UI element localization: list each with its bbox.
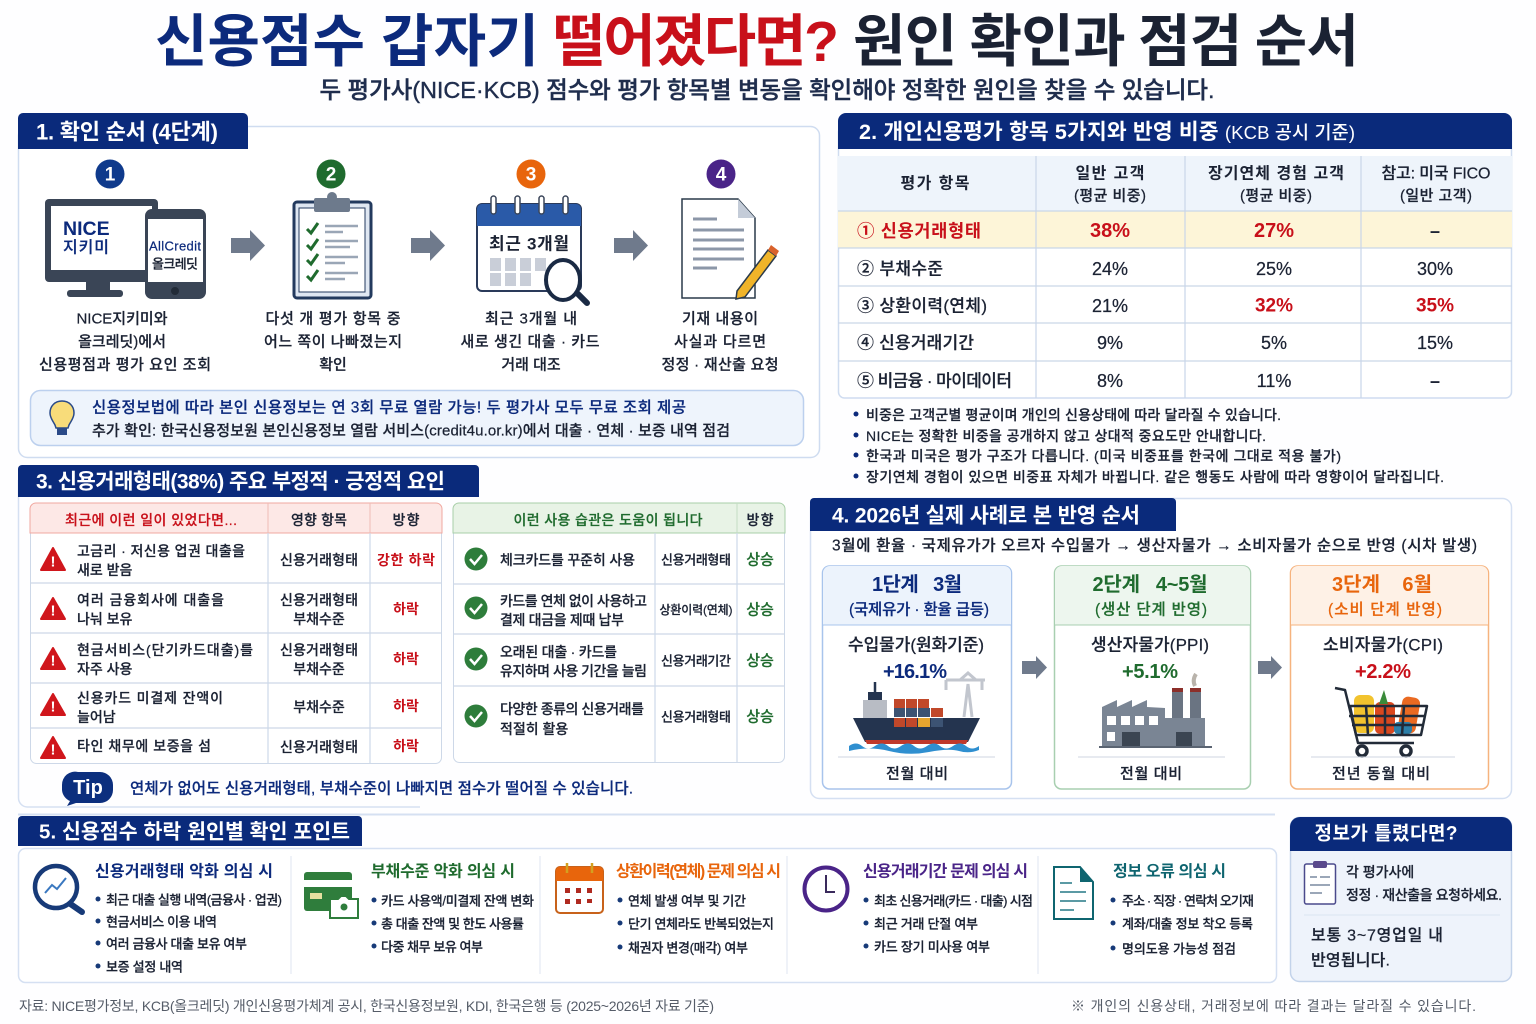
row 5: ! bbox=[50, 742, 56, 758]
table header: 방향 bbox=[746, 512, 774, 528]
step 3 text bbox=[460, 310, 600, 374]
card: 1단계: +16.1% bbox=[883, 661, 947, 683]
column: 정보 오류: 주소 · 직장 · 연락처 오기재 bbox=[1122, 894, 1254, 908]
title: 떨어졌다면? bbox=[553, 10, 839, 74]
callout: free report: 신용정보법에 따라 본인 신용정보는 연 3회 무료 열람 가능! 두 평가사 모두 무료 조회 제공 bbox=[92, 398, 686, 416]
row 2: ② 부채수준 bbox=[857, 260, 943, 278]
panel: 3. 신용거래형태 요인 bbox=[18, 465, 785, 807]
tip: Tip bbox=[73, 777, 103, 799]
heading: 정보가 틀렸다면 bbox=[1290, 817, 1512, 851]
row 1: 상승 bbox=[746, 552, 774, 568]
icon: monitor and phone: 올크레딧 bbox=[152, 256, 198, 272]
icon: light bulb bbox=[50, 401, 74, 435]
row 3: 상승 bbox=[746, 652, 774, 670]
card: 1단계: 수입물가(원화기준) bbox=[848, 636, 984, 654]
column: 정보 오류 bbox=[1054, 862, 1254, 956]
title: 신용점수 bbox=[155, 10, 365, 74]
notes under table: 한국과 미국은 평가 구조가 다릅니다. (미국 비중표를 한국에 그대로 적용 불가) bbox=[866, 448, 1341, 464]
row 4: 신용거래형태 bbox=[661, 710, 731, 724]
row 5: – bbox=[1430, 371, 1440, 391]
heading: 확인 순서: 1. 확인 순서 (4단계) bbox=[36, 120, 218, 144]
step 2 text: 어느 쪽이 나빠졌는지 bbox=[264, 334, 402, 350]
panel: 정보가 틀렸다면: 각 평가사에 bbox=[1346, 864, 1414, 880]
step 2 number bbox=[316, 160, 346, 188]
icon: credit card bbox=[304, 872, 358, 918]
icon: container ship bbox=[849, 673, 985, 754]
icon: clock bbox=[804, 868, 848, 910]
row 3: 부채수준 bbox=[293, 661, 345, 677]
tip bbox=[62, 772, 633, 806]
arrow bbox=[411, 230, 445, 261]
icon: calendar with magnifier: 최근 3개월 bbox=[489, 234, 569, 254]
row 4 bbox=[41, 690, 419, 725]
row 2: 결제 대금을 제때 납부 bbox=[500, 612, 624, 628]
column: 상환이력: 채권자 변경(매각) 여부 bbox=[628, 940, 748, 956]
footer: source: 자료: NICE평가정보, KCB(올크레딧) 개인신용평가체계 공시, 한국신용정보원, KDI, 한국은행 등 (2025~2026년 자료 기준) bbox=[19, 998, 714, 1014]
row 5: 하락 bbox=[393, 738, 419, 754]
step 4 number: 4 bbox=[716, 164, 727, 186]
card: 1단계: 1단계 3월 bbox=[872, 573, 962, 596]
icon: monitor and phone: NICE bbox=[63, 218, 110, 240]
card: 2단계: 2단계 4~5월 bbox=[1092, 573, 1208, 596]
table header: 일반 고객 bbox=[1076, 164, 1144, 182]
row 2: ! bbox=[50, 602, 56, 620]
row 4: 상승 bbox=[746, 708, 774, 726]
row 3: 35% bbox=[1416, 296, 1454, 316]
row 4: 부채수준 bbox=[293, 699, 345, 715]
table: negative factors bbox=[30, 503, 442, 764]
column: 신용거래기간: 신용거래기간 문제 의심 시 bbox=[863, 862, 1028, 880]
heading: 사례: 4. 2026년 실제 사례로 본 반영 순서 bbox=[832, 504, 1140, 528]
card: 1단계 bbox=[822, 566, 1012, 789]
row 2: 25% bbox=[1256, 259, 1292, 279]
step 3 text: 최근 3개월 내 bbox=[485, 310, 577, 328]
column: 상환이력 bbox=[556, 862, 781, 956]
title: 갑자기 bbox=[381, 10, 539, 74]
card: 3단계: 전년 동월 대비 bbox=[1332, 766, 1430, 782]
panel: 5. 확인 포인트 bbox=[18, 814, 1276, 982]
card: 2단계: 전월 대비 bbox=[1120, 766, 1182, 782]
table: positive factors bbox=[453, 503, 785, 762]
heading: 확인 포인트: 5. 신용점수 하락 원인별 확인 포인트 bbox=[39, 820, 350, 844]
icon: monitor and phone: AllCredit bbox=[149, 238, 201, 254]
table header: (평균 비중) bbox=[1074, 188, 1146, 204]
row 4: 15% bbox=[1417, 333, 1453, 353]
heading: 요인 bbox=[18, 465, 479, 497]
heading: 요인: 3. 신용거래형태(38%) 주요 부정적 · 긍정적 요인 bbox=[36, 470, 445, 494]
row 1: 신용거래형태 bbox=[661, 552, 731, 568]
icon: calendar bbox=[556, 863, 603, 913]
row 5: ⑤ 비금융 · 마이데이터 bbox=[857, 372, 1012, 390]
step 1 text: 올크레딧)에서 bbox=[78, 334, 166, 350]
row 1: – bbox=[1430, 221, 1440, 241]
tip: 연체가 없어도 신용거래형태, 부채수준이 나빠지면 점수가 떨어질 수 있습니다. bbox=[130, 780, 633, 798]
row 1: 38% bbox=[1090, 220, 1130, 242]
heading: 확인 포인트 bbox=[18, 816, 362, 846]
row 2: 상환이력(연체) bbox=[660, 603, 732, 617]
icon: calendar with magnifier bbox=[477, 196, 587, 303]
row 1: 신용거래형태 bbox=[280, 552, 358, 568]
panel: 정보가 틀렸다면: 반영됩니다. bbox=[1311, 952, 1390, 970]
step 1 number: 1 bbox=[105, 164, 116, 186]
step 4 number bbox=[706, 160, 736, 188]
table header bbox=[65, 512, 420, 528]
row 2: 신용거래형태 bbox=[280, 592, 358, 608]
icon: document with pencil bbox=[682, 199, 779, 299]
row 5: 신용거래형태 bbox=[280, 739, 358, 755]
row 5: 11% bbox=[1257, 371, 1291, 391]
heading: 사례 bbox=[810, 498, 1176, 531]
step 1 text: NICE지키미와 bbox=[76, 310, 168, 328]
callout: free report bbox=[30, 390, 804, 446]
column: 신용거래형태: 여러 금융사 대출 보유 여부 bbox=[106, 936, 247, 952]
row 4: 하락 bbox=[393, 698, 419, 714]
row 3 bbox=[464, 644, 774, 679]
notes under table: NICE는 정확한 비중을 공개하지 않고 상대적 중요도만 안내합니다. bbox=[866, 428, 1266, 444]
card: 3단계 bbox=[1290, 566, 1488, 789]
arrow bbox=[1258, 656, 1282, 679]
step 3 number bbox=[516, 160, 546, 188]
card: 2단계: 생산자물가(PPI) bbox=[1091, 636, 1209, 654]
row 1: 고금리 · 저신용 업권 대출을 bbox=[77, 543, 245, 559]
row 2: 30% bbox=[1417, 259, 1453, 279]
column: 신용거래형태: 최근 대출 실행 내역(금융사 · 업권) bbox=[106, 892, 282, 908]
column: 부채수준: 다중 채무 보유 여부 bbox=[381, 940, 483, 954]
table header: 방향 bbox=[392, 512, 420, 528]
card: 3단계: 소비자물가(CPI) bbox=[1323, 636, 1443, 654]
step 1 text bbox=[39, 310, 211, 374]
step 2 text bbox=[264, 310, 402, 374]
heading: 평가 항목 5가지 bbox=[838, 113, 1512, 149]
notes under table: 장기연체 경험이 있으면 비중표 자체가 바뀝니다. 같은 행동도 사람에 따라 영향이어 달라집니다. bbox=[866, 469, 1444, 485]
column: 신용거래기간: 최초 신용거래(카드 · 대출) 시점 bbox=[874, 894, 1033, 908]
table header: 영향 항목 bbox=[291, 512, 347, 528]
row 4: 신용카드 미결제 잔액이 bbox=[77, 690, 223, 706]
row 5: 8% bbox=[1097, 371, 1123, 391]
card: 1단계: (국제유가 · 환율 급등) bbox=[849, 600, 989, 618]
row 3: 자주 사용 bbox=[77, 661, 133, 677]
row 5 bbox=[857, 371, 1440, 391]
callout: free report: 추가 확인: 한국신용정보원 본인신용정보 열람 서비스(credit4u.or.kr)에서 대출 · 연체 · 보증 내역 점검 bbox=[92, 422, 730, 440]
card: 3단계: +2.2% bbox=[1355, 661, 1411, 683]
row 1 bbox=[857, 220, 1440, 242]
table header: 장기연체 경험 고객 bbox=[1208, 164, 1344, 182]
arrow bbox=[614, 230, 648, 261]
panel: 정보가 틀렸다면: 정정 · 재산출을 요청하세요. bbox=[1346, 887, 1502, 903]
icon: monitor and phone bbox=[45, 199, 206, 299]
icon: clipboard bbox=[1304, 861, 1336, 904]
icon: factory bbox=[1099, 674, 1212, 748]
heading: 정보가 틀렸다면: 정보가 틀렸다면? bbox=[1314, 822, 1458, 844]
heading: 평가 항목 5가지: 2. 개인신용평가 항목 5가지와 반영 비중 (KCB 공시 기준) bbox=[859, 120, 1355, 144]
arrow bbox=[1022, 656, 1047, 679]
notes under table bbox=[854, 407, 1444, 485]
icon: magnifier chart bbox=[35, 866, 82, 912]
row 1: ① 신용거래형태 bbox=[857, 221, 981, 241]
row 2: 상승 bbox=[746, 602, 774, 618]
column: 신용거래형태: 현금서비스 이용 내역 bbox=[106, 914, 217, 930]
row 3: 현금서비스(단기카드대출)를 bbox=[77, 642, 253, 658]
step 4 text: 정정 · 재산출 요청 bbox=[662, 356, 778, 374]
column: 정보 오류: 정보 오류 의심 시 bbox=[1113, 862, 1226, 880]
column: 신용거래형태: 보증 설정 내역 bbox=[106, 960, 183, 974]
row 2 bbox=[464, 593, 774, 628]
card: 2단계: (생산 단계 반영) bbox=[1095, 600, 1207, 618]
row 3: 오래된 대출 · 카드를 bbox=[500, 644, 617, 660]
heading: 확인 순서 bbox=[18, 113, 248, 149]
step 4 text bbox=[662, 310, 778, 374]
row 3 bbox=[41, 642, 419, 677]
card: 1단계: 전월 대비 bbox=[886, 766, 948, 782]
arrow bbox=[231, 230, 265, 261]
column: 상환이력: 단기 연체라도 반복되었는지 bbox=[628, 916, 774, 932]
table header: 이런 사용 습관은 도움이 됩니다 bbox=[514, 512, 703, 528]
row 1 bbox=[464, 548, 774, 570]
subtitle: 두 평가사(NICE·KCB) 점수와 평가 항목별 변동을 확인해야 정확한 원인을 찾을 수 있습니다. bbox=[320, 77, 1214, 103]
step 4 text: 기재 내용이 bbox=[682, 310, 758, 328]
step 2 text: 확인 bbox=[319, 356, 347, 374]
row 3 bbox=[857, 296, 1454, 316]
column: 상환이력: 연체 발생 여부 및 기간 bbox=[628, 894, 746, 908]
row 1: 새로 받음 bbox=[77, 562, 133, 578]
column: 신용거래기간: 카드 장기 미사용 여부 bbox=[874, 940, 990, 954]
step 3 number: 3 bbox=[526, 164, 536, 186]
column: 신용거래형태: 신용거래형태 악화 의심 시 bbox=[95, 862, 273, 880]
panel: 2. 평가 항목 bbox=[838, 113, 1512, 398]
table header bbox=[900, 164, 1490, 204]
row 4: 다양한 종류의 신용거래를 bbox=[500, 701, 644, 717]
table header: (평균 비중) bbox=[1240, 188, 1312, 204]
panel: 정보가 틀렸다면: 보통 3~7영업일 내 bbox=[1311, 926, 1443, 944]
column: 부채수준 bbox=[304, 862, 534, 954]
row 1: ! bbox=[50, 554, 56, 570]
notes under table: 비중은 고객군별 평균이며 개인의 신용상태에 따라 달라질 수 있습니다. bbox=[866, 407, 1281, 423]
row 1: 체크카드를 꾸준히 사용 bbox=[500, 552, 635, 568]
table header: 참고: 미국 FICO bbox=[1382, 164, 1490, 182]
row 3: ! bbox=[50, 652, 56, 670]
icon: monitor and phone: 지키미 bbox=[63, 238, 109, 256]
row 2: 나눠 보유 bbox=[77, 611, 133, 627]
row 4: 늘어남 bbox=[77, 709, 116, 725]
icon: document bbox=[1054, 867, 1093, 919]
row 5 bbox=[41, 737, 419, 758]
row 1: 강한 하락 bbox=[377, 552, 435, 568]
row 1: 27% bbox=[1254, 220, 1294, 242]
step 1 text: 신용평점과 평가 요인 조회 bbox=[39, 356, 211, 374]
row 3: 유지하며 사용 기간을 늘림 bbox=[500, 663, 647, 679]
panel: 1. 확인 순서 bbox=[18, 113, 820, 458]
panel: 정보가 틀렸다면 bbox=[1290, 817, 1512, 982]
row 3: 21% bbox=[1092, 296, 1128, 316]
panel: 4. 2026년 사례 bbox=[810, 498, 1512, 798]
step 2 text: 다섯 개 평가 항목 중 bbox=[266, 310, 401, 328]
column: 부채수준: 카드 사용액/미결제 잔액 변화 bbox=[381, 894, 534, 908]
column: 부채수준: 부채수준 악화 의심 시 bbox=[371, 862, 515, 880]
column: 상환이력: 상환이력(연체) 문제 의심 시 bbox=[616, 862, 781, 880]
row 2 bbox=[41, 592, 419, 627]
title bbox=[155, 10, 1359, 74]
card: 2단계: +5.1% bbox=[1122, 661, 1178, 683]
row 3: 신용거래기간 bbox=[661, 654, 731, 668]
row 2: 카드를 연체 없이 사용하고 bbox=[500, 593, 647, 609]
panel: 4. 2026년 사례: 3월에 환율 · 국제유가가 오르자 수입물가 → 생산자물가 → 소비자물가 순으로 반영 (시차 발생) bbox=[832, 536, 1477, 554]
table header: (일반 고객) bbox=[1400, 188, 1472, 204]
table: rating items bbox=[838, 156, 1512, 398]
row 4: ! bbox=[50, 698, 56, 716]
column: 신용거래기간 bbox=[804, 862, 1033, 954]
column: 정보 오류: 명의도용 가능성 점검 bbox=[1122, 942, 1236, 956]
icon: shopping cart bbox=[1335, 688, 1427, 756]
row 2 bbox=[857, 259, 1453, 279]
card: 2단계 bbox=[1054, 566, 1250, 789]
column: 정보 오류: 계좌/대출 정보 착오 등록 bbox=[1122, 916, 1253, 932]
step 3 text: 거래 대조 bbox=[501, 356, 561, 374]
row 3: 하락 bbox=[393, 651, 419, 667]
table header: 평가 항목 bbox=[900, 174, 970, 192]
step 1 number bbox=[96, 160, 124, 188]
step 2 number: 2 bbox=[326, 164, 336, 186]
row 4 bbox=[464, 701, 774, 737]
card: 3단계: 3단계 6월 bbox=[1332, 573, 1432, 596]
row 3: 32% bbox=[1255, 296, 1293, 316]
row 2: 하락 bbox=[393, 601, 419, 617]
icon: clipboard checklist bbox=[294, 192, 371, 298]
row 4 bbox=[857, 333, 1453, 353]
table header: 최근에 이런 일이 있었다면... bbox=[65, 512, 237, 528]
row 2: 여러 금융회사에 대출을 bbox=[77, 592, 224, 608]
row 5: 타인 채무에 보증을 섬 bbox=[77, 738, 211, 754]
column: 신용거래형태 bbox=[35, 862, 282, 974]
step 4 text: 사실과 다르면 bbox=[674, 334, 766, 350]
row 3: 신용거래형태 bbox=[280, 642, 358, 658]
row 1 bbox=[41, 543, 435, 578]
row 4: 5% bbox=[1261, 333, 1287, 353]
row 4: 9% bbox=[1097, 333, 1123, 353]
row 3: ③ 상환이력(연체) bbox=[857, 296, 987, 316]
row 2: 부채수준 bbox=[293, 611, 345, 627]
row 4: 적절히 활용 bbox=[500, 721, 568, 737]
row 4: ④ 신용거래기간 bbox=[857, 334, 974, 352]
row 2: 24% bbox=[1092, 259, 1128, 279]
column: 부채수준: 총 대출 잔액 및 한도 사용률 bbox=[381, 916, 524, 932]
title: 원인 확인과 점검 순서 bbox=[853, 10, 1359, 74]
step 3 text: 새로 생긴 대출 · 카드 bbox=[460, 334, 600, 350]
column: 신용거래기간: 최근 거래 단절 여부 bbox=[874, 916, 978, 932]
card: 3단계: (소비 단계 반영) bbox=[1328, 600, 1442, 618]
footer: note: ※ 개인의 신용상태, 거래정보에 따라 결과는 달라질 수 있습니다. bbox=[1071, 998, 1476, 1014]
